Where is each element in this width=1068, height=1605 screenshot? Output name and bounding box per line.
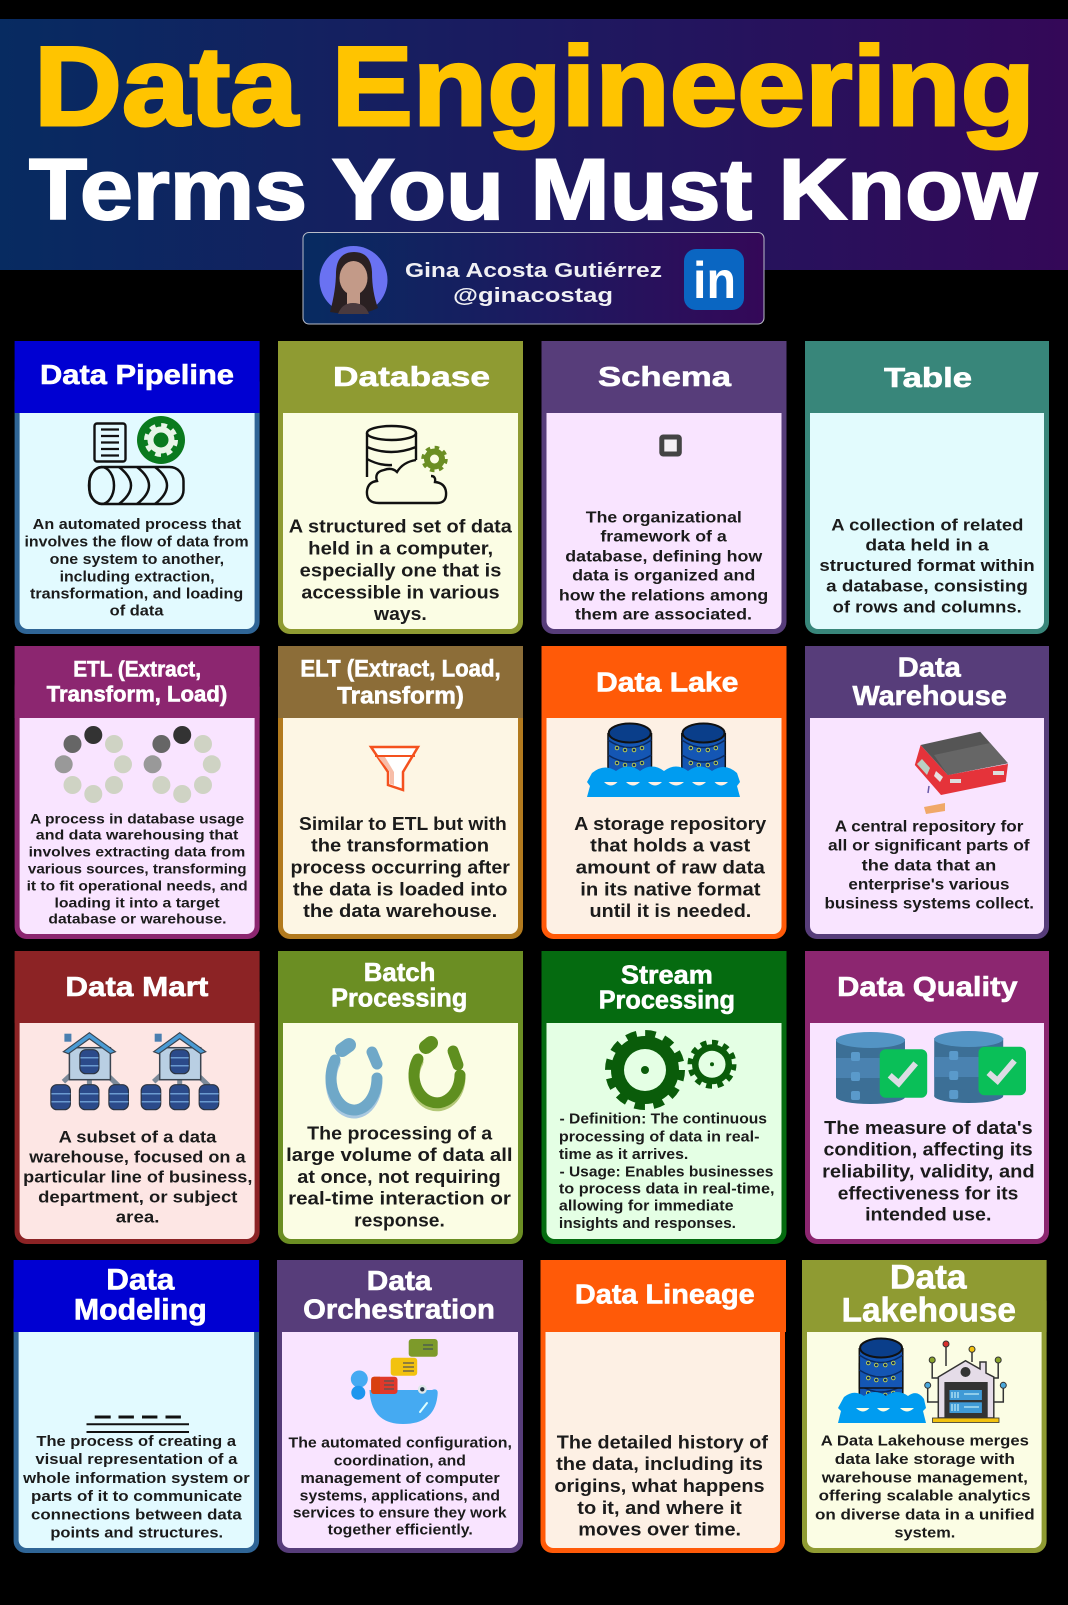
definition: data lake storage with: [835, 1451, 1015, 1468]
title: [29, 24, 1038, 238]
panel: Batch Processing: [278, 951, 523, 1244]
definition: [22, 1433, 250, 1541]
panel: Data Pipeline: [15, 341, 260, 634]
definition: systems, applications, and: [300, 1488, 500, 1504]
definition: area.: [116, 1208, 159, 1226]
definition: The organizational: [586, 510, 742, 527]
panel: Data Mart: [15, 951, 260, 1244]
panel: Data Warehouse: [805, 646, 1049, 939]
definition: them are associated.: [575, 606, 752, 623]
icon: square placeholder: [662, 437, 679, 454]
definition: at once, not requiring: [297, 1167, 501, 1187]
heading: Data: [898, 652, 961, 683]
definition: how the relations among: [559, 588, 768, 605]
definition: origins, what happens: [554, 1476, 765, 1496]
definition: - Usage: Enables businesses: [560, 1164, 773, 1180]
definition: [559, 1112, 774, 1232]
definition: condition, affecting its: [824, 1140, 1033, 1160]
heading: [842, 1258, 1016, 1330]
definition: to it, and where it: [577, 1498, 742, 1518]
heading: Data Lineage: [575, 1278, 755, 1309]
definition: large volume of data all: [286, 1145, 513, 1165]
definition: especially one that is: [300, 560, 501, 580]
definition: structured format within: [819, 556, 1035, 575]
definition: A collection of related: [831, 515, 1023, 534]
heading: Database: [333, 361, 490, 392]
definition: warehouse, focused on a: [28, 1148, 246, 1166]
definition: - Definition: The continuous: [560, 1112, 767, 1128]
definition: particular line of business,: [23, 1168, 252, 1186]
icon: databases in a lake: [587, 724, 740, 797]
definition: all or significant parts of: [828, 838, 1030, 855]
definition: [819, 515, 1035, 616]
heading: Processing: [599, 984, 735, 1014]
definition: A subset of a data: [59, 1128, 217, 1146]
definition: A storage repository: [574, 814, 766, 834]
definition: the data, including its: [556, 1454, 763, 1474]
icon: warehouse building: [915, 732, 1008, 814]
heading: ELT (Extract, Load,: [300, 656, 501, 683]
definition: database, defining how: [565, 549, 763, 566]
header banner: [0, 19, 1068, 270]
icon: document, gear and pipeline: [89, 416, 185, 504]
icon: author avatar: [320, 246, 388, 314]
definition: whole information system or: [22, 1470, 250, 1487]
definition: visual representation of a: [35, 1451, 238, 1468]
heading: Transform, Load): [47, 682, 227, 707]
panel: Schema: [542, 341, 786, 634]
definition: management of computer: [300, 1471, 500, 1487]
definition: A structured set of data: [289, 517, 513, 537]
definition: [554, 1432, 769, 1540]
definition: effectiveness for its: [838, 1183, 1018, 1203]
heading: ETL (Extract,: [73, 657, 201, 682]
definition: response.: [354, 1211, 445, 1231]
heading: [331, 957, 467, 1013]
heading: [599, 959, 735, 1014]
definition: The measure of data's: [824, 1118, 1033, 1138]
heading: [303, 1265, 495, 1324]
icon: batch spinners: [331, 1043, 460, 1113]
panel: Data Lake: [542, 646, 786, 939]
panel: Stream Processing: [542, 951, 786, 1244]
icon: LinkedIn: in: [693, 252, 736, 310]
icon: lake database and smart warehouse: [838, 1338, 1006, 1423]
panel: Database: [278, 341, 523, 634]
definition: insights and responses.: [559, 1216, 736, 1232]
title: Data Engineering: [34, 24, 1035, 149]
definition: held in a computer,: [308, 538, 493, 558]
icon: whale with containers: [351, 1339, 438, 1424]
definition: including extraction,: [60, 569, 215, 585]
definition: points and structures.: [50, 1524, 223, 1541]
definition: services to ensure they work: [293, 1506, 507, 1522]
definition: transformation, and loading: [30, 586, 243, 602]
definition: Similar to ETL but with: [299, 814, 507, 834]
definition: time as it arrives.: [559, 1147, 688, 1163]
definition: warehouse management,: [821, 1469, 1028, 1486]
author name: Gina Acosta Gutiérrez: [405, 260, 662, 282]
definition: and data warehousing that: [36, 826, 239, 842]
definition: data is organized and: [572, 568, 755, 585]
definition: on diverse data in a unified: [815, 1506, 1035, 1523]
panel: Table: [805, 341, 1049, 634]
definition: the data is loaded into: [293, 879, 508, 899]
panel: Data Quality: [805, 951, 1049, 1244]
definition: accessible in various: [301, 582, 500, 602]
definition: reliability, validity, and: [822, 1161, 1035, 1181]
author handle: @ginacostag: [453, 285, 613, 307]
icon: loading spinners: [55, 726, 221, 803]
definition: [27, 810, 248, 927]
definition: An automated process that: [33, 517, 241, 533]
definition: processing of data in real-: [559, 1130, 760, 1146]
heading: [852, 652, 1007, 711]
definition: [574, 814, 766, 921]
panel: ETL: [15, 646, 260, 939]
definition: in its native format: [580, 879, 761, 899]
panel: ELT: [278, 646, 523, 939]
definition: framework of a: [600, 529, 727, 546]
definition: one system to another,: [50, 552, 224, 568]
heading: Stream: [621, 959, 713, 989]
icon: gears: [608, 1034, 734, 1106]
heading: Data Quality: [837, 971, 1018, 1002]
definition: business systems collect.: [824, 895, 1034, 912]
definition: [288, 1435, 512, 1539]
definition: [289, 517, 513, 624]
definition: [286, 1123, 513, 1231]
definition: A central repository for: [835, 819, 1023, 836]
definition: The process of creating a: [36, 1433, 237, 1450]
heading: Data: [367, 1265, 432, 1296]
panel: Data Modeling: [14, 1260, 259, 1553]
definition: [815, 1433, 1035, 1542]
title: Terms You Must Know: [29, 142, 1038, 238]
definition: The detailed history of: [557, 1432, 769, 1452]
heading: Modeling: [74, 1293, 207, 1326]
heading: Transform): [337, 682, 464, 709]
heading: Processing: [331, 983, 467, 1013]
definition: a database, consisting: [826, 577, 1028, 596]
heading: Data: [106, 1263, 175, 1296]
definition: A Data Lakehouse merges: [821, 1433, 1029, 1450]
heading: [47, 657, 227, 707]
definition: [559, 510, 768, 623]
icon: funnel: [371, 747, 418, 790]
definition: together efficiently.: [328, 1523, 473, 1539]
definition: involves extracting data from: [29, 844, 245, 860]
heading: [74, 1263, 207, 1326]
definition: the transformation: [311, 836, 489, 856]
heading: Data Lake: [596, 667, 738, 698]
definition: ways.: [373, 604, 427, 624]
definition: that holds a vast: [590, 836, 750, 856]
icon: verified databases: [836, 1031, 1026, 1104]
definition: department, or subject: [38, 1188, 238, 1206]
definition: various sources, transforming: [28, 861, 247, 877]
definition: process occurring after: [290, 857, 510, 877]
definition: until it is needed.: [590, 901, 751, 921]
panel: Data Lineage: [540, 1260, 786, 1553]
heading: Data: [890, 1258, 968, 1296]
definition: offering scalable analytics: [819, 1487, 1031, 1504]
author badge: [303, 232, 764, 324]
definition: coordination, and: [334, 1453, 466, 1469]
heading: Warehouse: [852, 680, 1007, 711]
icon: database cloud gear: [367, 426, 446, 503]
panel: Data Lakehouse: [802, 1258, 1047, 1553]
definition: of data: [110, 603, 165, 619]
heading: Schema: [598, 361, 732, 392]
definition: allowing for immediate: [559, 1199, 734, 1215]
definition: [824, 819, 1034, 912]
definition: [24, 517, 249, 619]
definition: amount of raw data: [576, 857, 766, 877]
definition: loading it into a target: [54, 894, 220, 910]
definition: parts of it to communicate: [31, 1488, 242, 1505]
icon: dashed lines: [86, 1417, 189, 1432]
definition: [23, 1128, 252, 1226]
definition: data held in a: [865, 536, 989, 555]
heading: Table: [884, 362, 972, 393]
definition: real-time interaction or: [288, 1189, 511, 1209]
heading: Lakehouse: [842, 1292, 1016, 1330]
definition: connections between data: [31, 1506, 243, 1523]
definition: moves over time.: [578, 1520, 741, 1540]
definition: the data warehouse.: [303, 901, 497, 921]
definition: intended use.: [865, 1205, 991, 1225]
heading: Batch: [364, 957, 435, 987]
definition: [822, 1118, 1035, 1225]
definition: to process data in real-time,: [559, 1182, 774, 1198]
heading: Data Pipeline: [40, 359, 234, 390]
heading: Orchestration: [303, 1293, 495, 1324]
definition: enterprise's various: [848, 877, 1010, 894]
icon: data marts: [51, 1033, 219, 1110]
definition: A process in database usage: [30, 810, 244, 826]
definition: system.: [894, 1525, 955, 1542]
definition: involves the flow of data from: [24, 535, 249, 551]
definition: of rows and columns.: [833, 597, 1022, 616]
definition: [290, 814, 510, 921]
definition: it to fit operational needs, and: [27, 877, 248, 893]
definition: the data that an: [862, 858, 996, 875]
definition: The automated configuration,: [288, 1435, 512, 1451]
heading: Data Mart: [65, 971, 208, 1002]
definition: The processing of a: [307, 1123, 493, 1143]
panel: Data Orchestration: [277, 1260, 523, 1553]
definition: database or warehouse.: [48, 911, 227, 927]
heading: [300, 656, 501, 709]
